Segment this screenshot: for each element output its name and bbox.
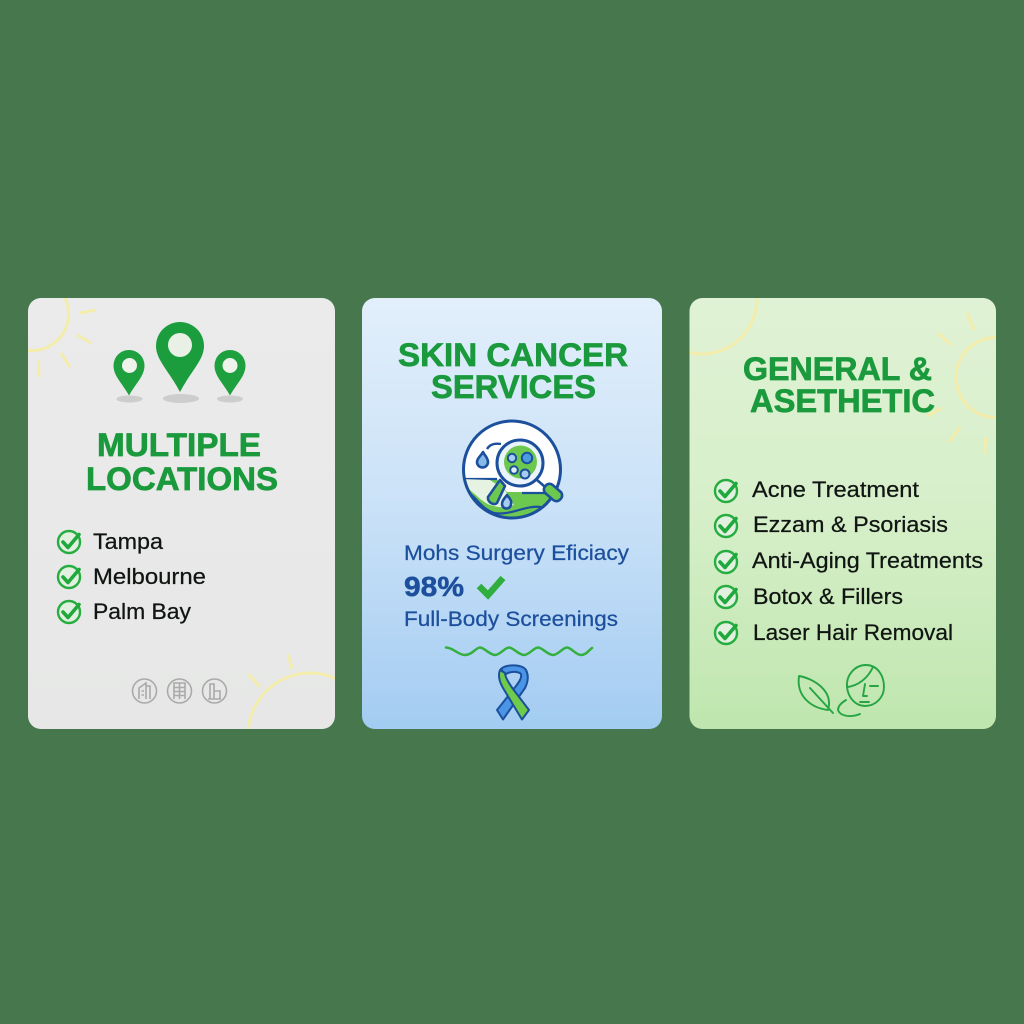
icon: face bbox=[838, 665, 884, 716]
list item: Tampa bbox=[58, 529, 163, 554]
heading: skin cancer services: SERVICES bbox=[431, 369, 596, 405]
card background: locations bbox=[28, 298, 335, 729]
list item: Tampa: Tampa bbox=[93, 529, 163, 554]
decorative sun: right bbox=[926, 312, 996, 454]
stat: 98 percent: 98% bbox=[404, 571, 464, 602]
list item: eczema and psoriasis: Ezzam & Psoriasis bbox=[753, 512, 948, 537]
icon: leaf bbox=[799, 676, 833, 713]
heading: general and asethetic bbox=[743, 351, 935, 419]
heading: multiple locations: LOCATIONS bbox=[86, 461, 278, 497]
list item: laser hair removal: Laser Hair Removal bbox=[753, 620, 953, 645]
heading: general and asethetic: ASETHETIC bbox=[750, 383, 935, 419]
panel: skin cancer services bbox=[362, 298, 662, 729]
heading: multiple locations bbox=[86, 427, 278, 497]
icon: awareness ribbon bbox=[497, 665, 529, 720]
list item: botox and fillers: Botox & Fillers bbox=[753, 584, 903, 609]
icon: check mark bbox=[479, 578, 503, 595]
heading: skin cancer services bbox=[398, 337, 628, 405]
card background: general bbox=[690, 298, 996, 729]
text: mohs surgery efficacy: Mohs Surgery Eficiacy bbox=[404, 541, 629, 565]
decorative sun: top left bbox=[28, 298, 96, 377]
panel: general and aesthetic bbox=[690, 298, 996, 729]
wavy divider bbox=[446, 648, 592, 655]
list item: acne treatment: Acne Treatment bbox=[752, 477, 920, 502]
icons: three buildings bbox=[132, 679, 226, 703]
decorative sun: top left bbox=[690, 298, 758, 356]
heading: multiple locations: MULTIPLE bbox=[97, 427, 261, 463]
decorative sun: bottom right bbox=[246, 654, 335, 729]
heading: general and asethetic: GENERAL & bbox=[743, 351, 932, 387]
icon: magnifier over skin bbox=[460, 421, 564, 520]
list item: Palm Bay: Palm Bay bbox=[93, 599, 192, 624]
text: full-body screenings: Full-Body Screenings bbox=[404, 607, 618, 631]
list item: Melbourne: Melbourne bbox=[93, 564, 206, 589]
icon: three map pins bbox=[114, 322, 246, 403]
card background: skin cancer bbox=[362, 298, 662, 729]
list: cities bbox=[58, 529, 206, 624]
panel: multiple locations bbox=[28, 298, 335, 729]
list: treatments bbox=[715, 477, 983, 645]
list item: anti-aging treatments: Anti-Aging Treatments bbox=[752, 548, 983, 573]
heading: skin cancer services: SKIN CANCER bbox=[398, 337, 628, 373]
